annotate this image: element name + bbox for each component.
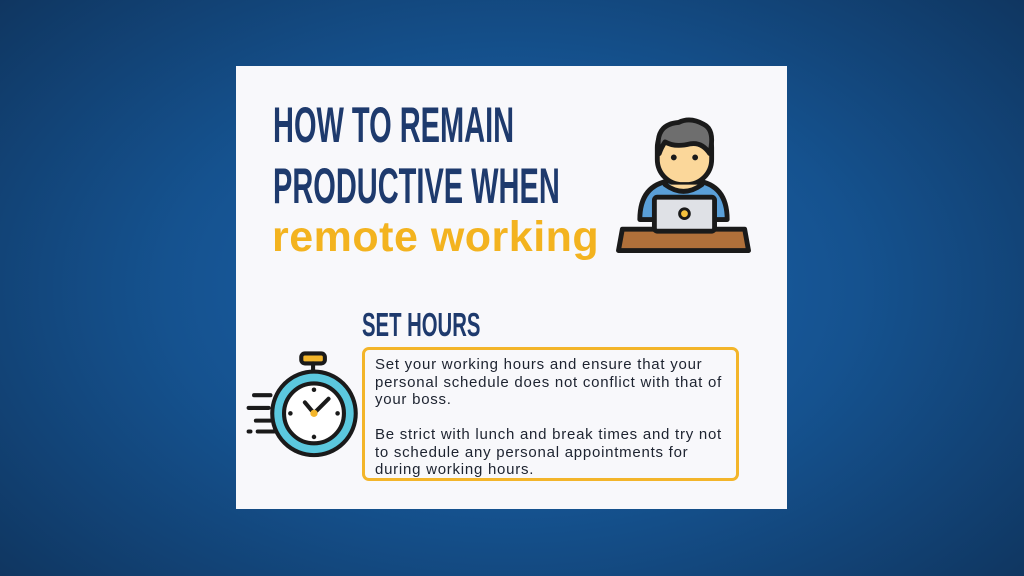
icon: person at laptop [616, 118, 751, 253]
title line 1: HOW TO REMAIN [273, 97, 514, 153]
text box: set hours description [362, 347, 739, 481]
icon: stopwatch [246, 351, 358, 458]
heading: set hours: SET HOURS [362, 306, 480, 343]
paragraph 1: Set your working hours and ensure that your personal schedule does not conflict with that of your boss. [375, 356, 722, 408]
title highlight: remote working [272, 213, 599, 261]
panel: card [236, 66, 787, 509]
title [272, 97, 599, 261]
paragraph 2: Be strict with lunch and break times and try not to schedule any personal appointments for during working hours. [375, 426, 722, 478]
title line 2: PRODUCTIVE WHEN [273, 158, 560, 214]
